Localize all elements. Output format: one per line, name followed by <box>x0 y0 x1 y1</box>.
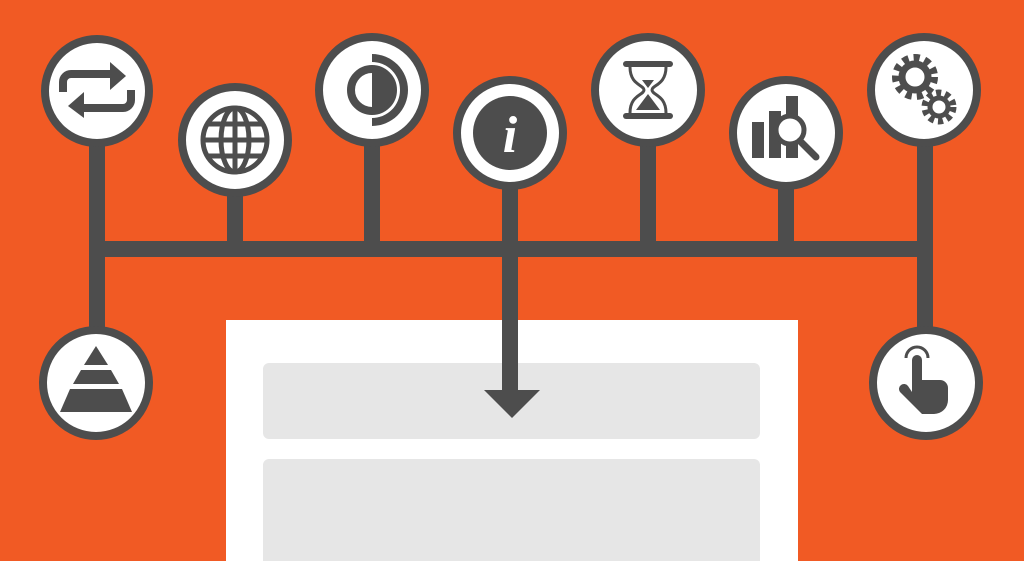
icon: info <box>457 80 563 186</box>
icon: hourglass <box>595 37 701 143</box>
icon: chart search <box>733 80 839 186</box>
icon: info: i <box>503 107 518 164</box>
icon: pointing hand <box>873 330 979 436</box>
icon: gears <box>871 37 977 143</box>
icon: pyramid <box>43 330 149 436</box>
arrow down <box>484 390 540 418</box>
connector network <box>89 140 933 395</box>
icon: globe <box>182 87 288 193</box>
icon: swap arrows <box>45 39 149 143</box>
icon: contrast <box>319 37 425 143</box>
document panel <box>226 320 798 561</box>
